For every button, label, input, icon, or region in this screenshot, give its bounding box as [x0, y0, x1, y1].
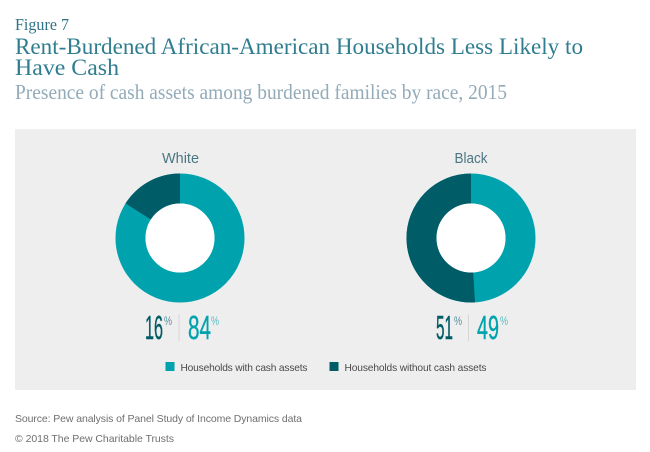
legend	[166, 362, 486, 374]
percent sign: %	[211, 314, 219, 328]
heading: White: White	[162, 150, 199, 167]
percent sign: %	[164, 314, 172, 328]
copyright: © 2018 The Pew Charitable Trusts	[15, 433, 174, 445]
source note: Source: Pew analysis of Panel Study of Income Dynamics data	[15, 413, 302, 425]
figure label: Figure 7	[15, 15, 69, 34]
title: Have Cash	[15, 55, 120, 80]
values: Black	[436, 309, 508, 346]
donut chart: Black	[406, 174, 520, 302]
percent sign: %	[454, 314, 462, 328]
values: White: 16	[145, 309, 163, 346]
value: Black with cash 49%: 49	[477, 309, 499, 346]
panel: chart background	[15, 129, 636, 390]
donut chart: White	[126, 173, 230, 288]
subtitle: Presence of cash assets among burdened families by race, 2015	[15, 80, 507, 104]
legend label: with cash: Households with cash assets	[180, 363, 308, 374]
legend swatch: without cash	[330, 362, 338, 371]
percent sign: %	[500, 314, 508, 328]
legend swatch: with cash	[166, 362, 174, 371]
legend label: without cash: Households without cash assets	[344, 363, 486, 374]
title	[15, 34, 583, 80]
values: Black: 51	[436, 309, 453, 346]
heading: Black: Black	[454, 150, 488, 167]
value: White with cash 84%: 84	[188, 309, 211, 346]
title: Rent-Burdened African-American Households Less Likely to	[15, 34, 583, 59]
values: White	[145, 309, 219, 346]
